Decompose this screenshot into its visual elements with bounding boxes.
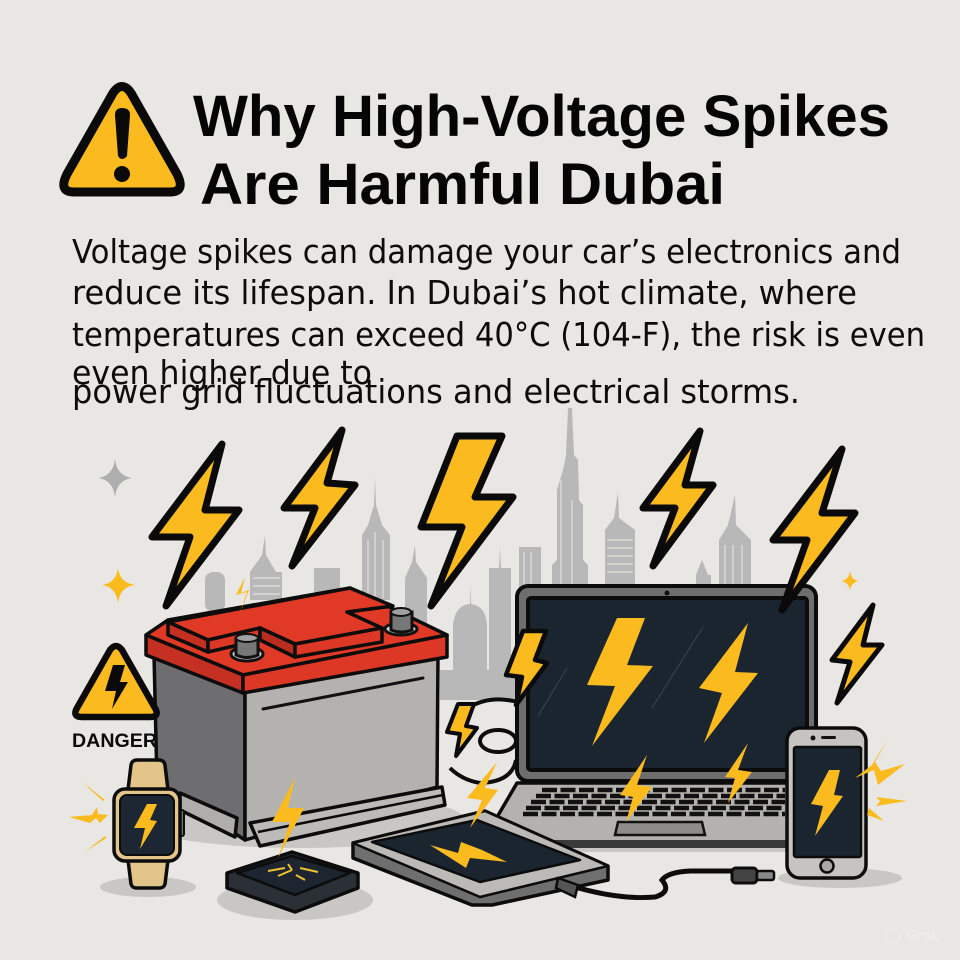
intro text block: reduce its lifespan. In Dubai’s hot climate, where — [72, 273, 857, 312]
title — [193, 84, 890, 217]
watch screen — [120, 795, 174, 855]
tablet connector — [556, 878, 578, 897]
power bank top — [237, 856, 350, 895]
phone screen — [794, 747, 861, 857]
storm bolt over laptop corner — [773, 449, 855, 610]
tablet screen — [372, 820, 580, 882]
storm bolts — [152, 430, 713, 606]
battery left face — [154, 655, 245, 840]
crown — [178, 810, 184, 836]
danger bolt — [105, 665, 128, 709]
battery lid rim left — [146, 635, 243, 693]
bolt between battery and tablet — [467, 762, 498, 828]
cracked spark — [268, 864, 318, 880]
strap bottom — [128, 860, 168, 888]
battery front face — [245, 655, 438, 840]
intro text block — [72, 232, 925, 411]
laptop trackpad — [615, 822, 705, 835]
skyline window details — [253, 480, 742, 600]
terminal front — [231, 634, 263, 661]
battery — [146, 588, 447, 846]
phone camera — [810, 736, 816, 740]
power bank — [227, 852, 358, 912]
intro text block: power grid fluctuations and electrical storms. — [72, 372, 800, 411]
power bank body — [227, 852, 358, 912]
webcam — [664, 590, 670, 596]
icon: small yellow sparkle — [841, 571, 859, 591]
icon: warning triangle — [64, 86, 180, 192]
Dubai skyline — [205, 408, 751, 700]
screen glare — [538, 627, 703, 716]
battery lid rim front — [243, 635, 447, 693]
phone bolt — [811, 770, 843, 836]
laptop base — [493, 783, 790, 846]
intro text block: Voltage spikes can damage your car’s electronics and — [72, 232, 901, 271]
raised lid walls — [168, 622, 382, 657]
tablet — [353, 811, 608, 905]
tablet body — [353, 811, 608, 905]
strap top — [128, 760, 168, 790]
bolt above power bank — [272, 778, 304, 858]
bolt right of laptop — [832, 605, 882, 703]
danger sign — [72, 646, 157, 752]
bolt at laptop edge — [506, 631, 547, 705]
laptop — [493, 586, 816, 848]
smartwatch — [114, 760, 184, 888]
plug tip — [757, 871, 774, 880]
raised lid top — [168, 588, 393, 644]
icon: yellow sparkle — [102, 568, 135, 603]
charging cable — [556, 868, 774, 898]
plug — [732, 868, 757, 883]
danger label: DANGER — [72, 731, 157, 752]
smartphone — [787, 728, 866, 878]
battery left foot — [180, 793, 237, 837]
intro text block: even higher due to — [72, 353, 372, 392]
cable loop — [450, 699, 518, 783]
ground shadows — [100, 792, 902, 920]
laptop lid — [517, 586, 816, 781]
title: Are Harmful Dubai — [200, 152, 725, 217]
case — [114, 789, 180, 861]
laptop screen — [528, 598, 807, 770]
icon: grey sparkle — [98, 459, 132, 497]
battery front foot — [250, 787, 445, 846]
laptop keyboard — [523, 790, 785, 814]
screen bolts — [587, 618, 758, 822]
bolt at cable — [447, 704, 477, 756]
battery lid top — [146, 588, 447, 675]
watch sparks — [69, 781, 108, 852]
small bolt on battery — [236, 577, 249, 613]
title: Why High-Voltage Spikes — [193, 84, 890, 149]
watch bolt — [134, 804, 157, 849]
phone body — [787, 728, 866, 878]
phone home button — [820, 860, 834, 872]
battery label line — [263, 678, 423, 709]
phone speaker — [821, 736, 836, 739]
danger triangle — [75, 646, 157, 717]
watermark: ◯ Grok — [885, 927, 939, 944]
terminal rear — [385, 608, 417, 635]
tablet bolt — [430, 842, 507, 868]
phone sparks — [855, 737, 907, 821]
